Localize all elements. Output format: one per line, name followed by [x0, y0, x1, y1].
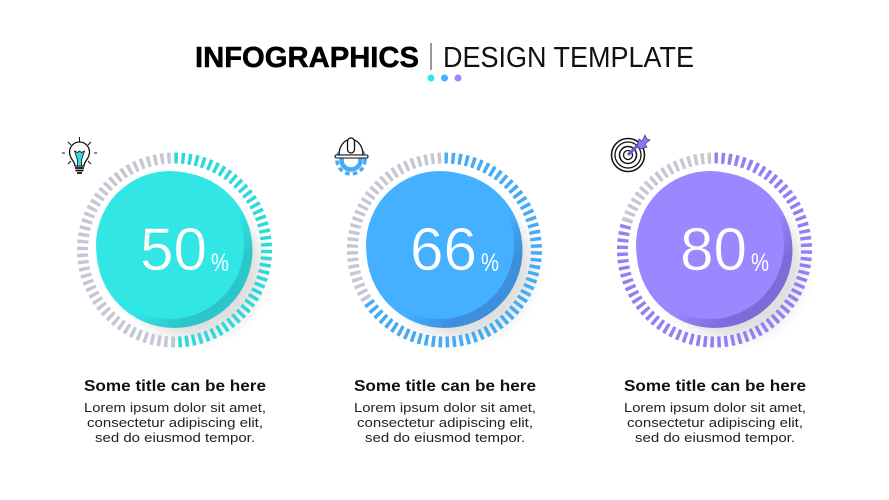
text block: column 3 — [624, 378, 806, 445]
gauge ticks 80% — [623, 158, 807, 342]
title dots — [428, 74, 462, 82]
title — [195, 42, 694, 74]
text block: column 1: consectetur adipiscing elit, — [87, 416, 263, 430]
panel: gauge 80% — [623, 158, 807, 342]
gauge disc shadow crescent — [366, 172, 522, 328]
gauge disc — [366, 171, 514, 319]
icon: helmet with gear — [335, 138, 368, 174]
text block: column 2: Some title can be here — [354, 378, 536, 395]
gauge ticks 66% — [352, 158, 536, 342]
gauge disc — [636, 171, 784, 319]
gauge disc shadow crescent — [96, 172, 252, 328]
gauge ticks 50% — [82, 158, 266, 342]
text block: column 3: consectetur adipiscing elit, — [627, 416, 803, 430]
value 80%: 80 — [680, 216, 747, 283]
panel: gauge 66% — [352, 158, 536, 342]
value 66%: 66 — [410, 216, 477, 283]
title: DESIGN TEMPLATE — [443, 42, 694, 74]
gauge disc shadow crescent — [636, 172, 792, 328]
value 80%: % — [751, 249, 769, 277]
text block: column 2: Lorem ipsum dolor sit amet, — [354, 401, 536, 415]
text block: column 1 — [84, 378, 266, 445]
text block: column 1: Some title can be here — [84, 378, 266, 395]
title: INFOGRAPHICS — [195, 42, 419, 74]
panel: gauge 50% — [82, 158, 266, 342]
text block: column 3: Lorem ipsum dolor sit amet, — [624, 401, 806, 415]
text block: column 2: sed do eiusmod tempor. — [365, 431, 525, 445]
value 50%: % — [211, 249, 229, 277]
value 50%: 50 — [140, 216, 207, 283]
text block: column 3: Some title can be here — [624, 378, 806, 395]
text block: column 2: consectetur adipiscing elit, — [357, 416, 533, 430]
text block: column 3: sed do eiusmod tempor. — [635, 431, 795, 445]
value 66%: % — [481, 249, 499, 277]
gauge disc — [96, 171, 244, 319]
icon: light bulb — [62, 137, 97, 173]
text block: column 2 — [354, 378, 536, 445]
text block: column 1: Lorem ipsum dolor sit amet, — [84, 401, 266, 415]
icon: target with arrow — [612, 135, 650, 172]
text block: column 1: sed do eiusmod tempor. — [95, 431, 255, 445]
